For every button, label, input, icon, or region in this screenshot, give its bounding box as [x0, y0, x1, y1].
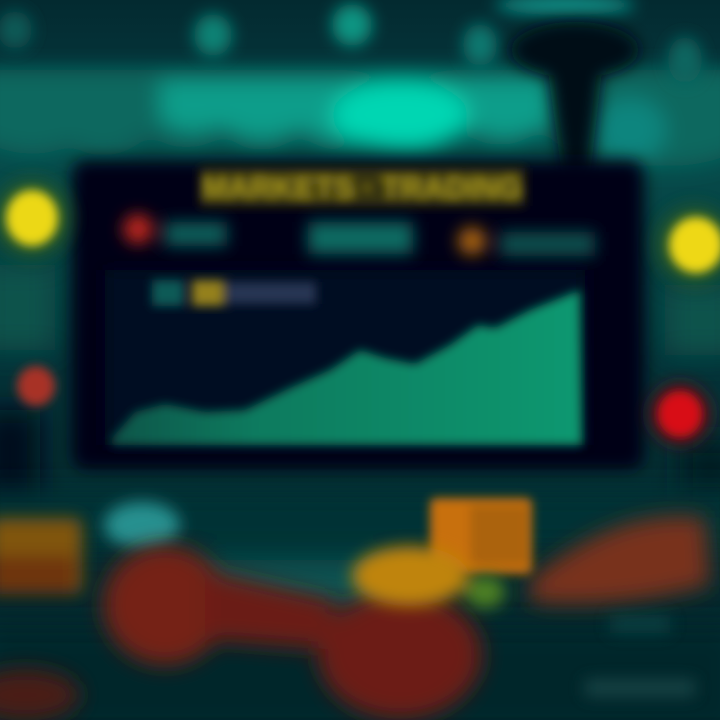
top teal band: [0, 70, 720, 170]
monitor title: MARKETS · TRADING: [202, 170, 522, 205]
right red light: [648, 382, 712, 446]
foreground table: [0, 490, 720, 720]
chart legend: [152, 280, 316, 306]
left orange block: [0, 518, 82, 594]
red-brown dumbbell shapes: [0, 516, 710, 720]
left red light: [17, 366, 55, 406]
left yellow light: [0, 178, 72, 258]
monitor: [72, 160, 644, 470]
right yellow light: [655, 205, 720, 285]
dark monitor stand: [511, 22, 639, 175]
lower right glow: [585, 615, 695, 696]
teal sphere: [104, 502, 180, 548]
chart panel shade: [105, 270, 585, 445]
area chart: [112, 290, 582, 445]
top bokeh lights: [0, 0, 702, 83]
orange cube: [430, 498, 532, 574]
side panels: [0, 265, 720, 510]
yellow-orange lump: [352, 546, 505, 608]
legend row: [123, 214, 595, 256]
